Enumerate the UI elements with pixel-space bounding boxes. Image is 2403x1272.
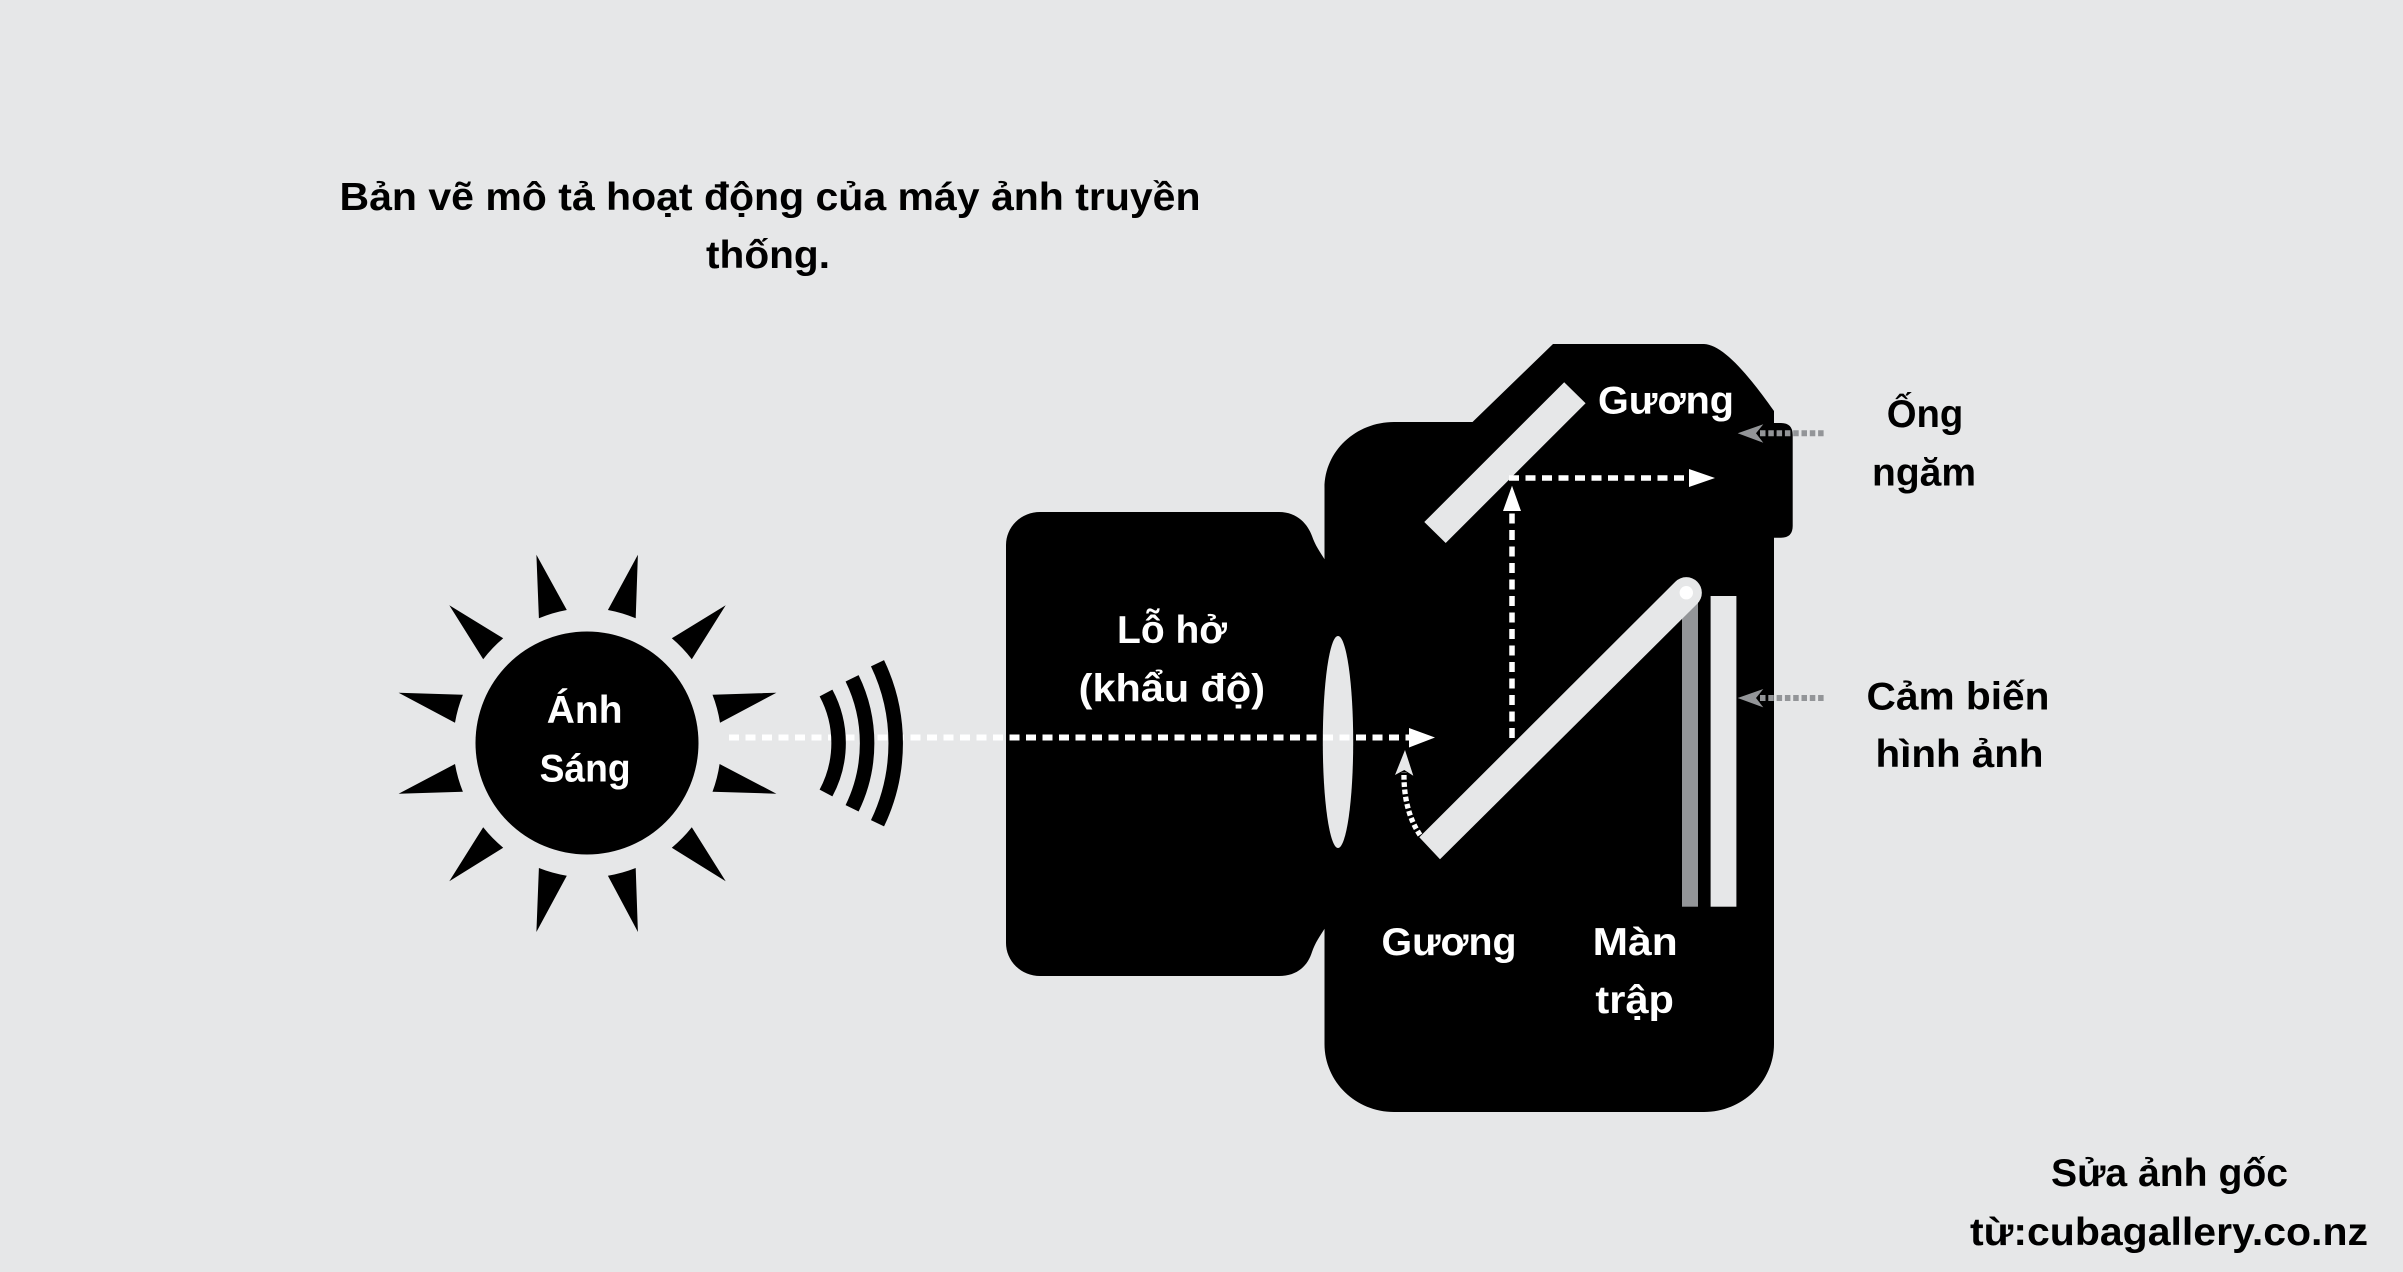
main mirror bbox=[1419, 577, 1702, 859]
label: aperture bbox=[1079, 608, 1265, 711]
label: shutter bbox=[1593, 921, 1678, 1022]
label: aperture: (khẩu độ) bbox=[1079, 668, 1265, 711]
label: viewfinder: ngăm bbox=[1872, 452, 1976, 495]
credit bbox=[1970, 1152, 2368, 1254]
label: image sensor bbox=[1866, 676, 2050, 776]
sun disc bbox=[476, 632, 698, 854]
arrow: mirror swing bbox=[1395, 750, 1420, 835]
sun rays bbox=[399, 555, 776, 932]
label: shutter: Màn bbox=[1593, 921, 1678, 964]
credit: từ:cubagallery.co.nz bbox=[1970, 1211, 2368, 1254]
sun label: Sáng bbox=[540, 748, 631, 791]
camera body bbox=[1324, 344, 1793, 1112]
shutter bbox=[1682, 600, 1698, 907]
icon: light waves bbox=[826, 663, 896, 823]
label: aperture: Lỗ hở bbox=[1117, 608, 1228, 652]
arrow: incoming light bbox=[729, 728, 1435, 748]
title bbox=[340, 176, 1200, 277]
upper mirror bbox=[1424, 382, 1586, 543]
arrow: to viewfinder bbox=[1509, 469, 1715, 487]
image sensor bbox=[1711, 596, 1736, 907]
icon: sun bbox=[399, 555, 776, 932]
label: image sensor: Cảm biến bbox=[1866, 676, 2050, 718]
title: Bản vẽ mô tả hoạt động của máy ảnh truyền bbox=[340, 176, 1200, 219]
title: thống. bbox=[706, 234, 830, 277]
arrow: viewfinder pointer bbox=[1738, 424, 1826, 443]
label: viewfinder: Ống bbox=[1887, 391, 1963, 436]
arrow: reflected up bbox=[1503, 486, 1521, 738]
credit: Sửa ảnh gốc bbox=[2051, 1152, 2288, 1195]
label: shutter: trập bbox=[1595, 979, 1674, 1022]
label: image sensor: hình ảnh bbox=[1876, 733, 2044, 776]
sun label bbox=[540, 688, 631, 791]
sun label: Ánh bbox=[547, 688, 622, 732]
label: upper mirror: Gương bbox=[1598, 379, 1734, 422]
arrow: sensor pointer bbox=[1738, 689, 1826, 707]
label: viewfinder bbox=[1872, 391, 1976, 495]
camera lens housing bbox=[1006, 512, 1325, 976]
label: main mirror: Gương bbox=[1382, 921, 1516, 964]
lens element bbox=[1323, 636, 1353, 848]
